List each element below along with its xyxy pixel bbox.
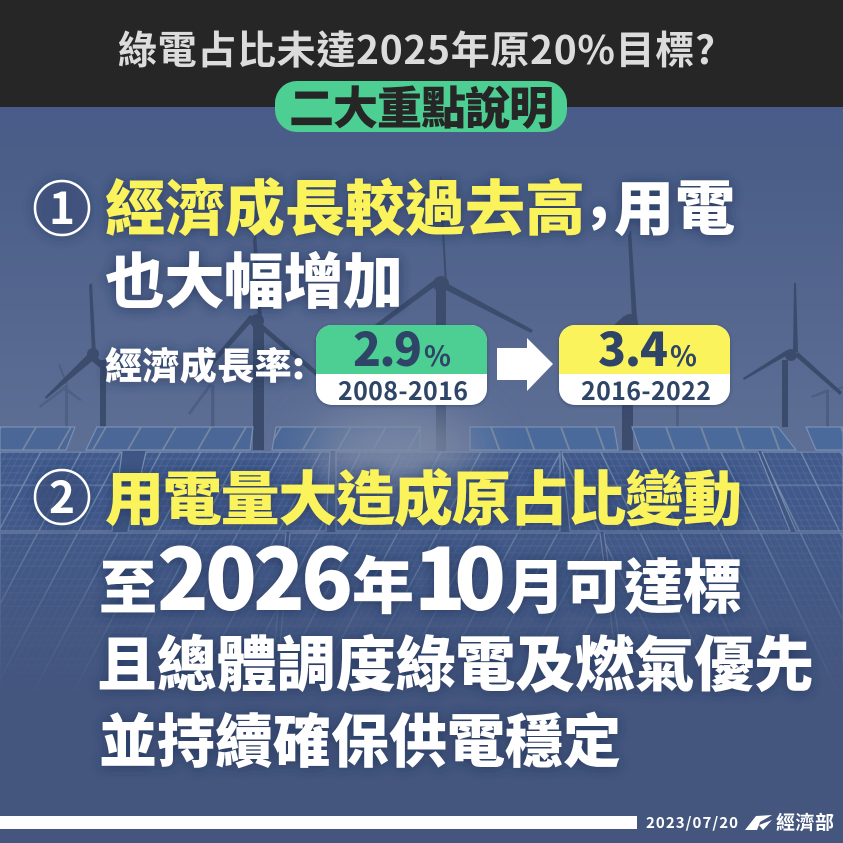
icon: ministry logo [745, 815, 772, 830]
stat card 2016-2022: % [670, 335, 697, 375]
section 1 heading [35, 154, 735, 321]
target date line: 年 [352, 536, 414, 626]
background: mist patch over panels [310, 410, 480, 494]
stat card 2008-2016: 2.9 [353, 314, 422, 380]
number badge 1: 1 [49, 173, 75, 237]
heading line 1 yellow: 經濟成長較過去高 [105, 161, 585, 248]
ministry name: 經濟部 [776, 808, 834, 835]
title: 綠電占比未達2025年原20%目標? [118, 20, 715, 76]
background: solar panels [0, 427, 843, 691]
heading comma: , [589, 154, 609, 235]
stat card 2008-2016: 2008-2016 [338, 372, 468, 408]
subtitle pill: 二大重點說明 [289, 72, 554, 137]
date: 2023/07/20 [646, 812, 738, 833]
stat card 2016-2022: 2016-2022 [581, 372, 711, 408]
section 2 text [35, 452, 814, 779]
growth rate label: 經濟成長率: [105, 336, 305, 390]
heading line 2: 也大幅增加 [105, 234, 403, 321]
dispatch line: 且總體調度綠電及燃氣優先 [97, 617, 814, 704]
stability line: 並持續確保供電穩定 [99, 695, 621, 779]
header band [0, 0, 843, 107]
target date line [99, 512, 742, 635]
bottom white bar [0, 816, 637, 829]
background: bottom solid blue [0, 694, 843, 843]
heading line 1 white: 用電 [614, 161, 735, 248]
background: wind turbines [39, 176, 843, 455]
number badge 1 [35, 173, 89, 237]
stat card 2016-2022 [558, 324, 732, 408]
target date line: 至 [99, 541, 157, 625]
arrow [497, 338, 553, 391]
stat card 2008-2016: % [424, 335, 451, 375]
stat card 2016-2022: 3.4 [598, 314, 668, 380]
number badge 2: 2 [49, 462, 75, 526]
target date line: 月可達標 [506, 540, 742, 625]
target date line: 10 [414, 512, 506, 635]
target date line: 2026 [157, 512, 353, 635]
number badge 2 [35, 462, 89, 526]
stat card 2008-2016 [314, 324, 488, 408]
background: fade into solid blue [0, 490, 843, 695]
section 2 heading: 用電量大造成原占比變動 [105, 452, 742, 537]
